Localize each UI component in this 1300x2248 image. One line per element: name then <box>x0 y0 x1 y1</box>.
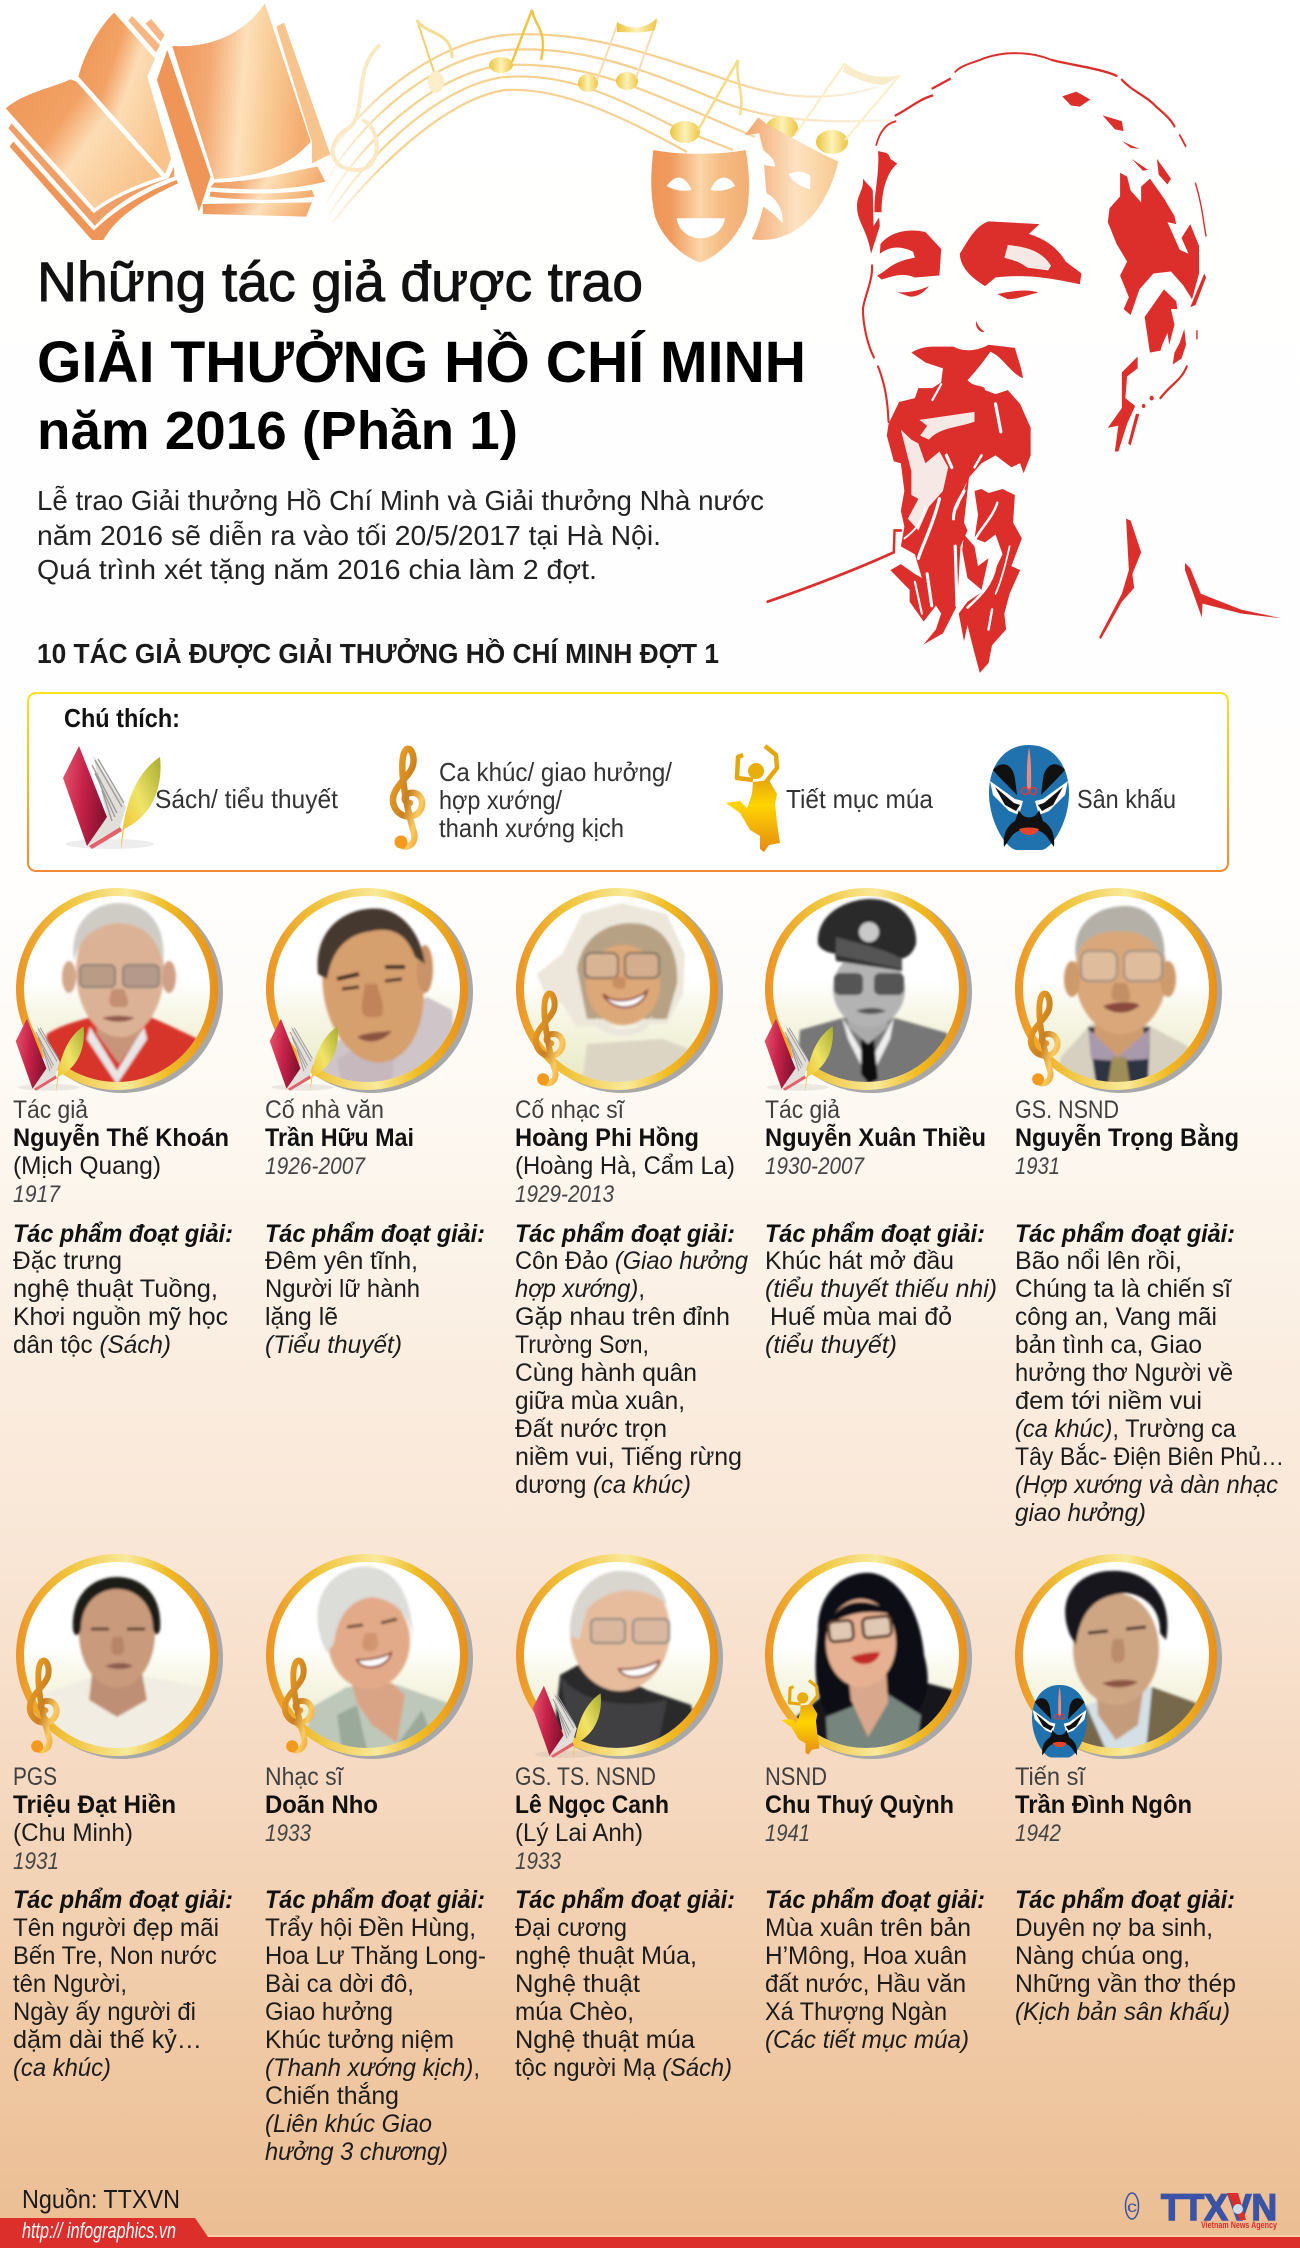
panel: legend <box>28 693 1228 871</box>
awarded works: công an, Vang mãi <box>1015 1303 1217 1331</box>
bio text: 1933 <box>515 1848 562 1875</box>
title: GIẢI THƯỞNG HỒ CHÍ MINH <box>37 330 806 395</box>
awarded works <box>13 1220 233 1359</box>
awarded works: (Tiểu thuyết) <box>265 1331 402 1359</box>
footer bar <box>0 2218 1300 2248</box>
illustration: red portrait of Ho Chi Minh <box>768 53 1281 673</box>
bio text: Lê Ngọc Canh <box>515 1791 669 1819</box>
awarded works: nghệ thuật Múa, <box>515 1942 697 1970</box>
awarded works: Khơi nguồn mỹ học <box>13 1303 228 1331</box>
portrait <box>1015 1554 1222 1759</box>
icon: book <box>270 1019 338 1092</box>
bio text <box>515 1096 735 1208</box>
bio text: 1942 <box>1015 1820 1061 1847</box>
awarded works: Đất nước trọn <box>515 1415 667 1443</box>
legend label: music: Ca khúc/ giao hưởng/ <box>439 757 673 787</box>
panel: Nguyễn Xuân Thiều <box>765 888 997 1359</box>
portrait <box>516 1554 723 1759</box>
awarded works: Đại cương <box>515 1914 627 1942</box>
awarded works: Bài ca dời đô, <box>265 1970 414 1998</box>
icon: dancer <box>782 1680 820 1755</box>
logo: TTXVN: TTXVN <box>1161 2187 1277 2228</box>
portrait <box>1015 888 1222 1093</box>
bio text <box>265 1763 378 1847</box>
bio text: Nhạc sĩ <box>265 1763 344 1791</box>
awarded works: Khúc hát mở đầu <box>765 1247 954 1275</box>
title: năm 2016 (Phần 1) <box>37 401 518 461</box>
bio text: 1941 <box>765 1820 810 1847</box>
bio text: 1933 <box>265 1820 312 1847</box>
bio text <box>515 1763 669 1875</box>
panel: Triệu Đạt Hiền <box>13 1554 233 2082</box>
awarded works: Nàng chúa ong, <box>1015 1942 1190 1970</box>
awarded works: Hoa Lư Thăng Long- <box>265 1942 486 1970</box>
awarded works: hợp xướng), <box>515 1275 645 1303</box>
portrait <box>765 888 972 1093</box>
awarded works: (Hợp xướng và dàn nhạc <box>1015 1471 1278 1499</box>
awarded works: (tiểu thuyết thiếu nhi) <box>765 1275 997 1303</box>
awarded works: niềm vui, Tiếng rừng <box>515 1443 742 1471</box>
awarded works: đem tới niềm vui <box>1015 1387 1202 1415</box>
awarded works: giao hưởng) <box>1015 1499 1146 1527</box>
awarded works: (Liên khúc Giao <box>265 2110 432 2138</box>
bio text: Triệu Đạt Hiền <box>13 1791 176 1819</box>
awarded works: dương (ca khúc) <box>515 1471 691 1499</box>
awarded works: dân tộc (Sách) <box>13 1331 171 1359</box>
awarded works: (tiểu thuyết) <box>765 1331 897 1359</box>
bio text: GS. TS. NSND <box>515 1763 656 1791</box>
awarded works: Gặp nhau trên đỉnh <box>515 1303 730 1331</box>
legend label: theatre: Sân khấu <box>1077 784 1176 814</box>
awarded works: Tác phẩm đoạt giải: <box>765 1220 985 1248</box>
panel: Chu Thuý Quỳnh <box>765 1554 985 2054</box>
awarded works: Người lữ hành <box>265 1275 420 1303</box>
awarded works: giữa mùa xuân, <box>515 1387 685 1415</box>
awarded works: (ca khúc), Trường ca <box>1015 1415 1236 1443</box>
awarded works: Tác phẩm đoạt giải: <box>13 1886 233 1914</box>
awarded works: (Kịch bản sân khấu) <box>1015 1998 1230 2026</box>
portrait <box>516 888 723 1093</box>
awarded works: Khúc tưởng niệm <box>265 2026 454 2054</box>
awarded works: Huế mùa mai đỏ <box>770 1303 952 1331</box>
awarded works: Giao hưởng <box>265 1998 393 2026</box>
panel: Doãn Nho <box>265 1554 486 2166</box>
illustration: open books <box>6 3 330 240</box>
awarded works: Trường Sơn, <box>515 1331 649 1359</box>
portrait <box>16 888 223 1093</box>
icon: treble clef <box>285 1660 312 1752</box>
awarded works: Nghệ thuật <box>515 1970 640 1998</box>
logo: TTXVN: c <box>1127 2199 1137 2216</box>
legend label: dance: Tiết mục múa <box>786 784 933 814</box>
icon: dancer <box>726 746 780 852</box>
icon: book <box>533 1686 601 1758</box>
bio text: Trần Hữu Mai <box>265 1124 414 1152</box>
awarded works: Chúng ta là chiến sĩ <box>1015 1275 1232 1303</box>
awarded works: (Thanh xướng kịch), <box>265 2054 480 2082</box>
awarded works: dặm dài thế kỷ… <box>13 2026 202 2054</box>
awarded works: Mùa xuân trên bản <box>765 1914 971 1942</box>
awarded works: Cùng hành quân <box>515 1359 697 1387</box>
panel: Trần Hữu Mai <box>265 888 485 1359</box>
awarded works: H’Mông, Hoa xuân <box>765 1942 967 1970</box>
footer bar: http:// infographics.vn <box>22 2218 176 2243</box>
icon: treble clef <box>30 1660 57 1752</box>
icon: book <box>16 1019 84 1092</box>
awarded works: Côn Đảo (Giao hưởng <box>515 1247 748 1275</box>
portrait <box>266 1554 473 1759</box>
awarded works: tên Người, <box>13 1970 127 1998</box>
awarded works: Tác phẩm đoạt giải: <box>1015 1886 1235 1914</box>
awarded works <box>265 1220 485 1359</box>
awarded works: (ca khúc) <box>13 2054 111 2082</box>
bio text: Tiến sĩ <box>1015 1763 1086 1791</box>
awarded works: Đặc trưng <box>13 1247 122 1275</box>
bio text: (Lý Lai Anh) <box>515 1819 643 1847</box>
legend label: music: thanh xướng kịch <box>439 813 624 843</box>
intro text: Quá trình xét tặng năm 2016 chia làm 2 đợt. <box>37 554 597 585</box>
bio text: Tác giả <box>765 1096 840 1124</box>
bio text <box>1015 1763 1192 1847</box>
intro text: Lễ trao Giải thưởng Hồ Chí Minh và Giải thưởng Nhà nước <box>37 485 764 516</box>
awarded works: Ngày ấy người đi <box>13 1998 196 2026</box>
bio text: Doãn Nho <box>265 1791 378 1819</box>
awarded works: Bến Tre, Non nước <box>13 1942 217 1970</box>
bio text: Hoàng Phi Hồng <box>515 1124 699 1152</box>
awarded works <box>765 1886 985 2054</box>
bio text: (Chu Minh) <box>13 1819 133 1847</box>
bio text: 1917 <box>13 1181 61 1208</box>
bio text: 1931 <box>1015 1153 1060 1180</box>
title: Những tác giả được trao <box>37 250 643 313</box>
icon: book <box>765 1019 833 1092</box>
intro text: năm 2016 sẽ diễn ra vào tối 20/5/2017 tại Hà Nội. <box>37 520 661 551</box>
bio text: 1929-2013 <box>515 1181 615 1208</box>
awarded works: múa Chèo, <box>515 1998 634 2026</box>
portrait <box>266 888 473 1093</box>
icon: opera mask <box>989 745 1069 850</box>
bio text: Chu Thuý Quỳnh <box>765 1791 954 1819</box>
awarded works: Tác phẩm đoạt giải: <box>1015 1220 1235 1248</box>
portrait <box>765 1554 972 1759</box>
bio text: 1926-2007 <box>265 1153 366 1180</box>
bio text <box>765 1096 986 1180</box>
panel: Nguyễn Trọng Bằng <box>1015 888 1284 1527</box>
bio text: Cố nhà văn <box>265 1096 384 1124</box>
awarded works: bản tình ca, Giao <box>1015 1331 1202 1359</box>
panel: Hoàng Phi Hồng <box>515 888 748 1499</box>
awarded works: Nghệ thuật múa <box>515 2026 695 2054</box>
awarded works: Trẩy hội Đền Hùng, <box>265 1914 476 1942</box>
awarded works: nghệ thuật Tuồng, <box>13 1275 218 1303</box>
bio text: Nguyễn Xuân Thiều <box>765 1122 986 1152</box>
awarded works: Xá Thượng Ngàn <box>765 1998 947 2026</box>
bio text: 1931 <box>13 1848 59 1875</box>
awarded works: đất nước, Hầu văn <box>765 1970 966 1998</box>
awarded works: Tác phẩm đoạt giải: <box>765 1886 985 1914</box>
icon: treble clef <box>393 749 422 848</box>
illustration: theatre masks <box>651 117 838 263</box>
bio text <box>1015 1096 1239 1180</box>
bio text: (Mịch Quang) <box>13 1152 161 1180</box>
awarded works: hưởng thơ Người về <box>1015 1359 1233 1387</box>
awarded works: lặng lẽ <box>265 1303 338 1331</box>
portrait <box>16 1554 223 1759</box>
panel: Lê Ngọc Canh <box>515 1554 735 2082</box>
awarded works: Đêm yên tĩnh, <box>265 1247 418 1275</box>
bio text: GS. NSND <box>1015 1096 1119 1124</box>
section heading: 10 TÁC GIẢ ĐƯỢC GIẢI THƯỞNG HỒ CHÍ MINH ĐỢT 1 <box>37 637 719 669</box>
bio text <box>765 1763 954 1847</box>
awarded works: Tên người đẹp mãi <box>13 1914 219 1942</box>
awarded works <box>765 1220 997 1359</box>
bio text: PGS <box>13 1763 57 1791</box>
awarded works: Chiến thắng <box>265 2081 399 2110</box>
icon: treble clef <box>536 993 563 1085</box>
bio text: NSND <box>765 1763 827 1791</box>
awarded works: Tác phẩm đoạt giải: <box>515 1220 735 1248</box>
awarded works: Tác phẩm đoạt giải: <box>265 1220 485 1248</box>
bio text: 1930-2007 <box>765 1153 865 1180</box>
bio text: Trần Đình Ngôn <box>1015 1791 1192 1819</box>
bio text: Nguyễn Thế Khoán <box>13 1122 229 1152</box>
awarded works: Tác phẩm đoạt giải: <box>515 1886 735 1914</box>
icon: treble clef <box>1031 993 1058 1085</box>
logo: TTXVN: Vietnam News Agency <box>1201 2220 1277 2230</box>
title <box>37 250 806 461</box>
intro text <box>37 485 764 585</box>
bio text: (Hoàng Hà, Cẩm La) <box>515 1152 735 1180</box>
awarded works <box>1015 1220 1284 1527</box>
legend label: music: hợp xướng/ <box>439 785 563 815</box>
source note: Nguồn: TTXVN <box>22 2184 180 2214</box>
awarded works <box>1015 1886 1236 2026</box>
legend label: books: Sách/ tiểu thuyết <box>155 784 339 814</box>
awarded works: hưởng 3 chương) <box>265 2138 448 2166</box>
legend label: music <box>439 757 673 843</box>
awarded works: (Các tiết mục múa) <box>765 2026 969 2054</box>
awarded works: Duyên nợ ba sinh, <box>1015 1914 1213 1942</box>
legend title: Chú thích: <box>64 703 180 733</box>
awarded works: tộc người Mạ (Sách) <box>515 2054 732 2082</box>
bio text: Tác giả <box>13 1096 88 1124</box>
illustration: music staff with notes <box>318 10 900 222</box>
bio text <box>13 1096 229 1208</box>
bio text: Cố nhạc sĩ <box>515 1096 625 1124</box>
icon: book and quill <box>63 746 161 850</box>
panel: Nguyễn Thế Khoán <box>13 888 233 1359</box>
bio text <box>13 1763 176 1875</box>
icon: opera mask <box>1032 1685 1087 1757</box>
panel: Trần Đình Ngôn <box>1015 1554 1236 2026</box>
awarded works: Tác phẩm đoạt giải: <box>13 1220 233 1248</box>
awarded works <box>13 1886 233 2082</box>
bio text: Nguyễn Trọng Bằng <box>1015 1122 1239 1152</box>
awarded works <box>515 1220 748 1499</box>
awarded works <box>265 1886 486 2166</box>
bio text <box>265 1096 414 1180</box>
awarded works: Những vần thơ thép <box>1015 1970 1236 1998</box>
awarded works: Tác phẩm đoạt giải: <box>265 1886 485 1914</box>
awarded works <box>515 1886 735 2082</box>
awarded works: Tây Bắc- Điện Biên Phủ… <box>1015 1442 1284 1471</box>
awarded works: Bão nổi lên rồi, <box>1015 1247 1182 1275</box>
